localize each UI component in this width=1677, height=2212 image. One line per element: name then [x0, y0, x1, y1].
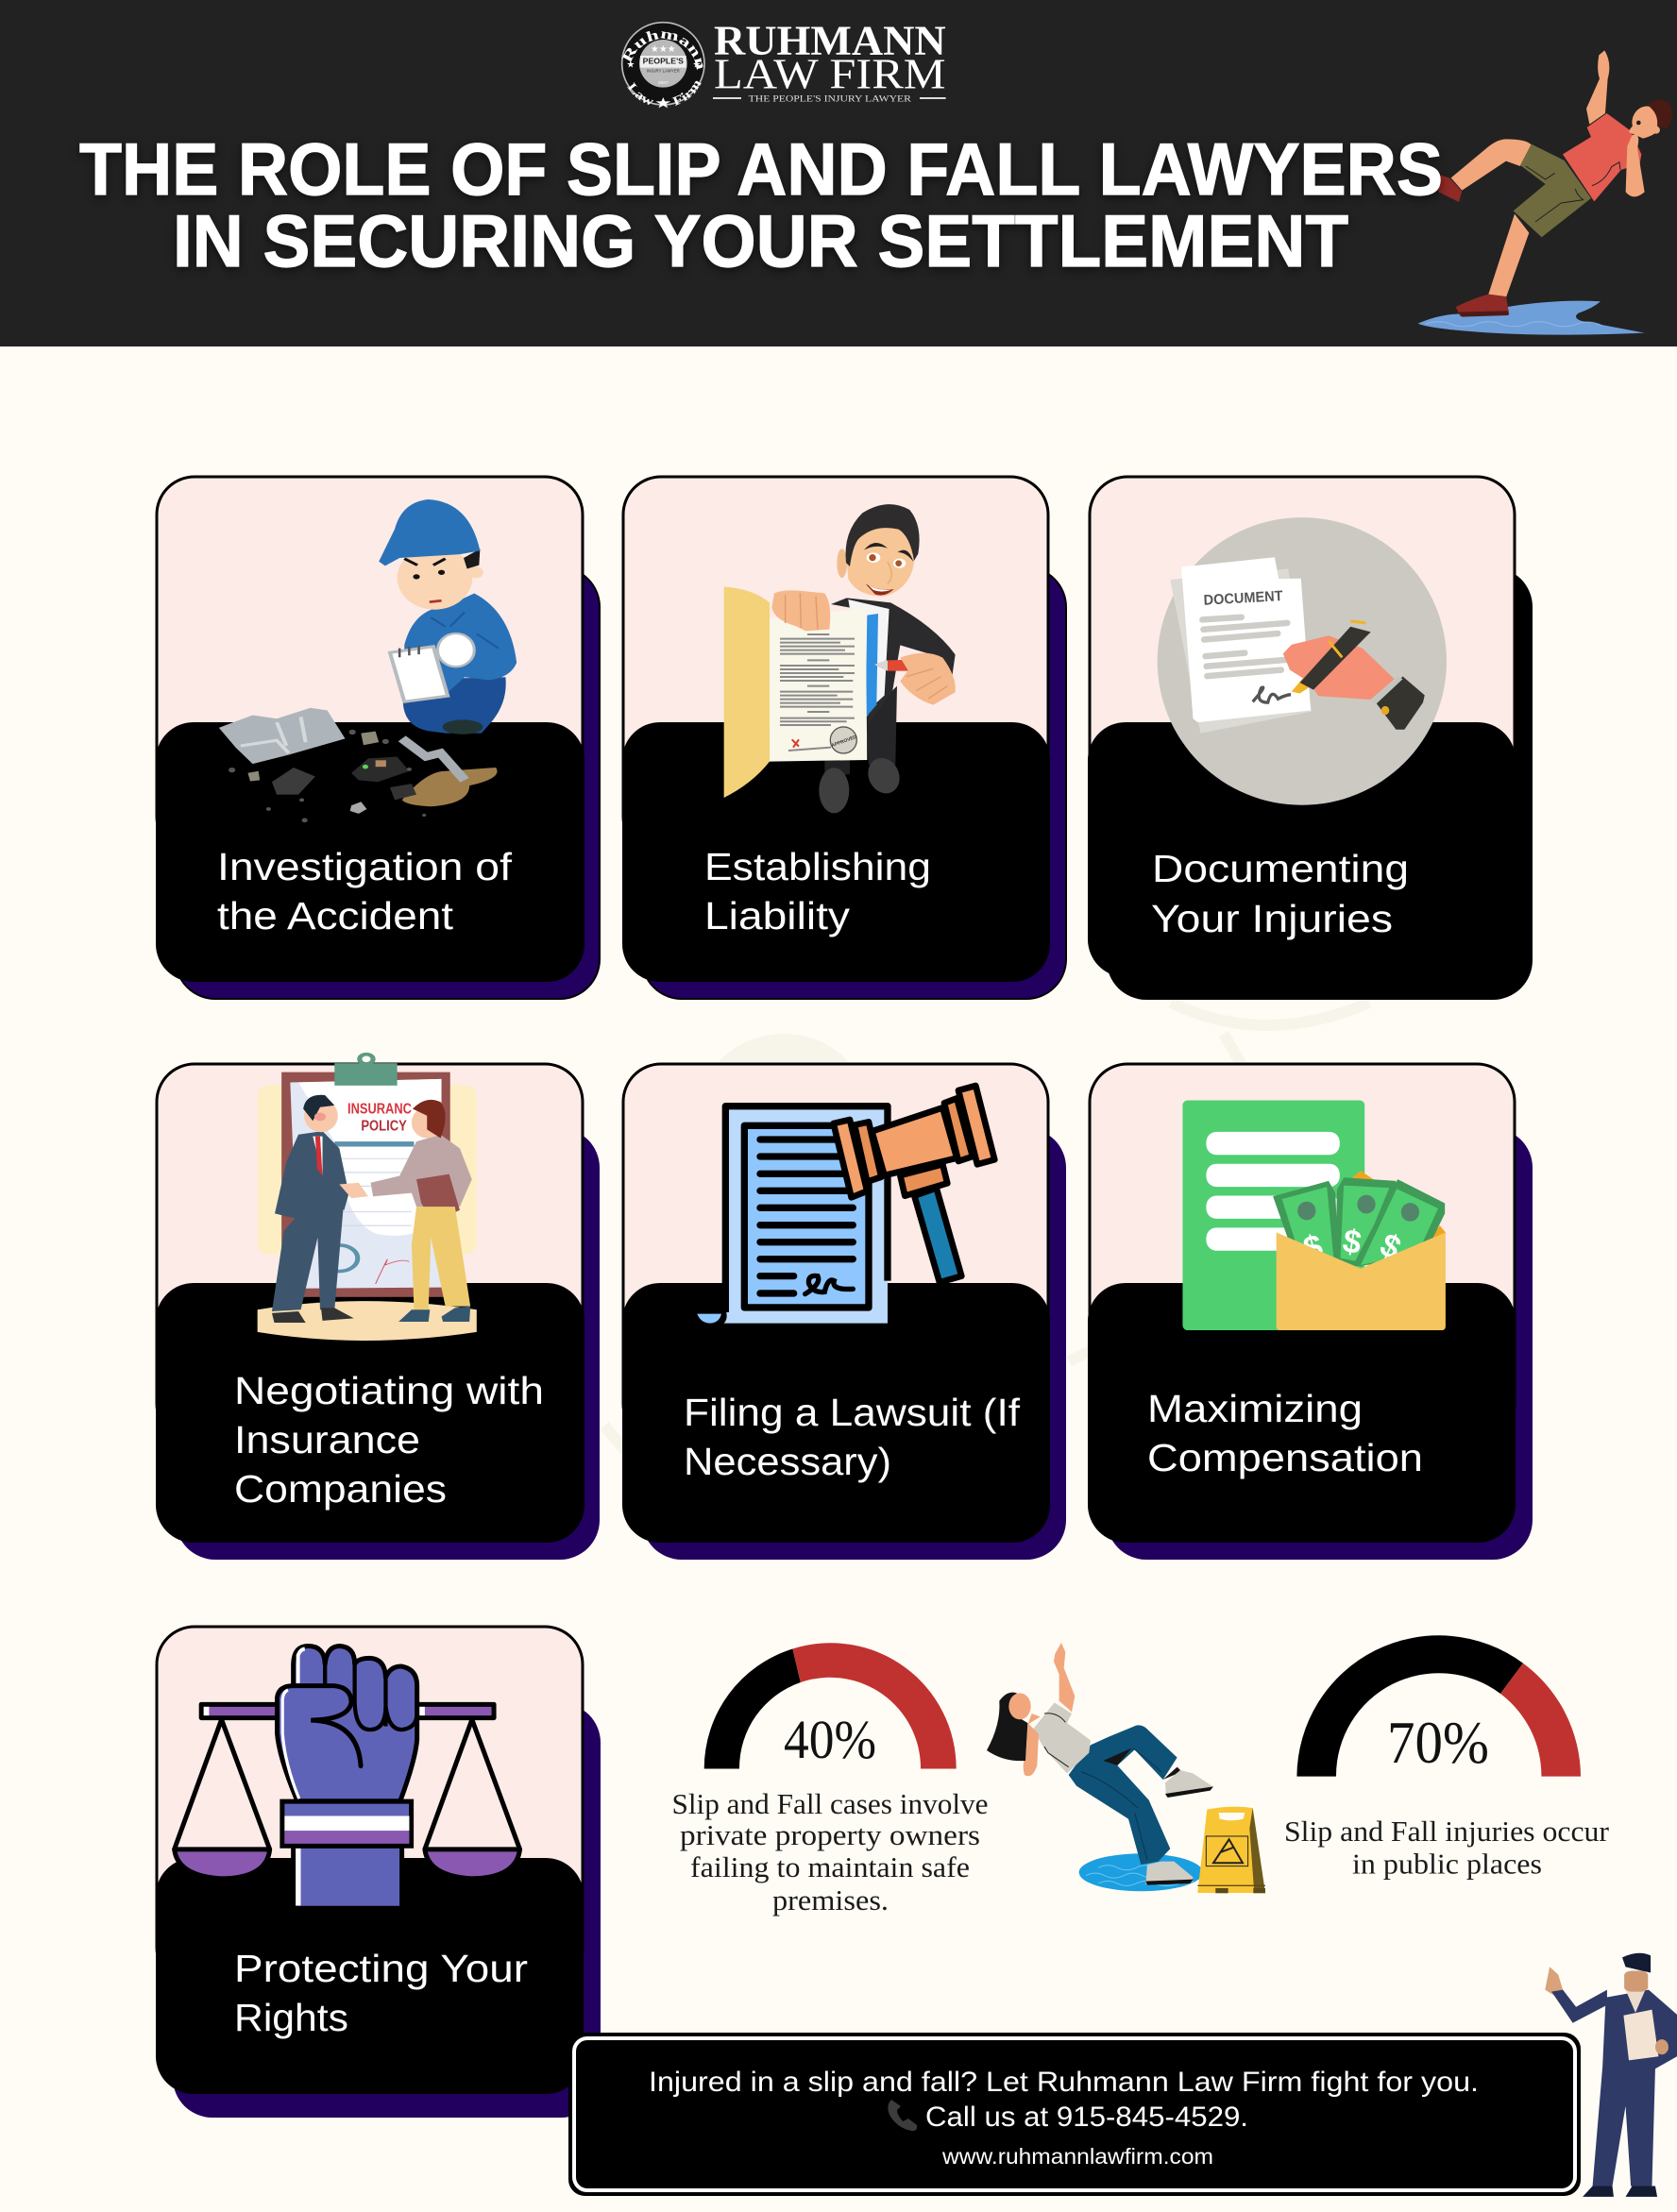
- text block: 40 percent caption: Slip and Fall cases involve: [672, 1787, 988, 1820]
- icon: hand signing document: DOCUMENT: [1203, 589, 1283, 609]
- logo seal: [621, 21, 705, 108]
- illustration: attorney pointing with papers: [1545, 1953, 1677, 2197]
- logo seal: 2007: [658, 80, 669, 86]
- heading: maximizing: Maximizing: [1147, 1387, 1363, 1430]
- icon: money envelope and form: $: [1340, 1223, 1364, 1261]
- logo seal: ★: [692, 60, 701, 71]
- heading: investigation: the Accident: [217, 894, 454, 937]
- text block: call to action: Injured in a slip and fall? Let Ruhmann Law Firm fight for you.: [649, 2067, 1479, 2098]
- logo seal: ★★★: [651, 44, 676, 55]
- panel: protecting your rights: [156, 1627, 601, 2118]
- icon: lawyer holding contract: [724, 504, 956, 813]
- icon: gavel and legal document: [697, 1086, 994, 1324]
- icon: handshake over insurance policy: [258, 1055, 477, 1341]
- title: THE ROLE OF SLIP AND FALL LAWYERS: [79, 127, 1443, 211]
- illustration: man slipping on puddle: [1418, 50, 1672, 335]
- callout: contact banner: [570, 2034, 1579, 2194]
- heading: investigation: Investigation of: [217, 845, 513, 888]
- icon: handshake over insurance policy: INSURANC: [347, 1100, 412, 1117]
- heading: filing: Filing a Lawsuit (If: [684, 1391, 1021, 1434]
- heading: protecting: Rights: [234, 1996, 348, 2039]
- stat: 70%: 70%: [1387, 1709, 1489, 1776]
- logo wordmark: [713, 17, 946, 103]
- icon: money envelope and form: $: [1375, 1226, 1406, 1267]
- icon: handshake over insurance policy: POLICY: [361, 1117, 407, 1134]
- stat: 40%: 40%: [784, 1709, 876, 1770]
- heading: filing: [684, 1391, 1021, 1483]
- text block: 70 percent caption: in public places: [1352, 1847, 1542, 1881]
- heading: documenting: [1151, 847, 1409, 940]
- title: IN SECURING YOUR SETTLEMENT: [173, 199, 1348, 282]
- heading: negotiating: Negotiating with: [234, 1369, 544, 1412]
- logo seal: ★: [626, 60, 635, 71]
- icon: hand signing document: [1158, 517, 1447, 805]
- chart: 70 percent gauge: [1296, 1635, 1581, 1777]
- panel: filing a lawsuit: [622, 1064, 1066, 1560]
- icon: money envelope and form: $: [1300, 1228, 1327, 1268]
- logo wordmark: RUHMANN: [714, 17, 946, 63]
- heading: investigation: [217, 845, 513, 937]
- text block: 70 percent caption: [1284, 1815, 1610, 1881]
- logo wordmark: LAW FIRM: [714, 49, 946, 97]
- text block: 40 percent caption: failing to maintain safe: [690, 1850, 970, 1883]
- header band: [0, 0, 1677, 346]
- text block: 40 percent caption: premises.: [772, 1883, 889, 1917]
- icon: lawyer holding contract: APPROVED: [831, 735, 857, 749]
- logo: [621, 17, 946, 108]
- logo seal: Ruhmann: [621, 30, 703, 70]
- heading: maximizing: [1147, 1387, 1423, 1479]
- panel: investigation of the accident: [156, 477, 600, 999]
- panel: establishing liability: [622, 477, 1066, 999]
- icon: inspector taking notes at debris: [219, 499, 517, 822]
- text block: call to action: Call us at 915-845-4529.: [925, 2102, 1248, 2133]
- heading: negotiating: Insurance: [234, 1418, 420, 1461]
- heading: liability: [704, 845, 931, 937]
- heading: documenting: Documenting: [1152, 847, 1409, 890]
- text block: 70 percent caption: Slip and Fall injuries occur: [1284, 1815, 1610, 1848]
- icon: money envelope and form: [1182, 1100, 1446, 1330]
- title: [79, 127, 1443, 282]
- text block: 40 percent caption: [672, 1787, 988, 1917]
- text block: call to action: [649, 2067, 1479, 2169]
- heading: protecting: Protecting Your: [234, 1947, 528, 1990]
- logo wordmark: THE PEOPLE'S INJURY LAWYER: [749, 93, 911, 103]
- panel: documenting your injuries: [1088, 477, 1533, 1000]
- text block: 40 percent caption: private property owners: [680, 1818, 980, 1851]
- heading: negotiating: [234, 1369, 544, 1511]
- chart: 40 percent gauge: [704, 1643, 957, 1770]
- heading: filing: Necessary): [684, 1440, 891, 1483]
- heading: liability: Liability: [704, 894, 851, 937]
- heading: negotiating: Companies: [234, 1467, 447, 1511]
- text block: call to action: www.ruhmannlawfirm.com: [941, 2144, 1213, 2169]
- panel: maximizing compensation: [1088, 1064, 1533, 1560]
- logo seal: PEOPLE'S: [643, 58, 685, 66]
- illustration: woman slipping by wet floor sign: [987, 1643, 1265, 1893]
- panel: negotiating with insurance companies: [156, 1055, 600, 1560]
- icon: fist holding scales: [175, 1646, 520, 1908]
- heading: protecting: [234, 1947, 528, 2039]
- logo seal: INJURY LAWYER: [647, 68, 680, 73]
- icon: phone: [888, 2100, 917, 2131]
- logo seal: Law ★ Firm: [627, 81, 702, 108]
- heading: documenting: Your Injuries: [1151, 897, 1393, 940]
- heading: liability: Establishing: [704, 845, 931, 888]
- heading: maximizing: Compensation: [1147, 1436, 1423, 1479]
